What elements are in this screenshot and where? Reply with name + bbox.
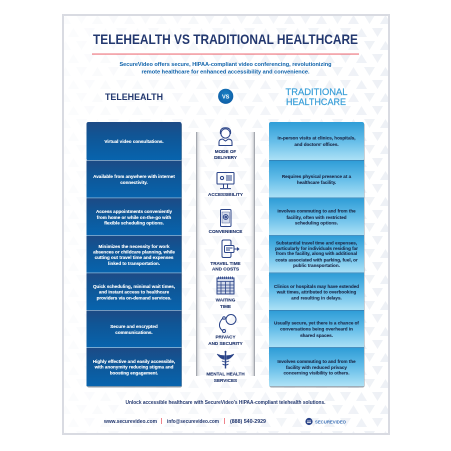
row: mode of delivery: In-person visits at clinics, hospitals,	[277, 136, 356, 141]
row: travel time and costs: linked to transportation.	[108, 261, 160, 266]
row: waiting time	[86, 273, 182, 311]
row: mental health services: Involves commuting to and from the	[277, 359, 356, 364]
title: TELEHEALTH VS TRADITIONAL HEALTHCARE	[93, 32, 358, 47]
row: mental health services: facility with reduced privacy	[286, 365, 347, 370]
label: privacy and security	[208, 335, 243, 346]
row: travel time and costs: from the facility, along with additional	[276, 251, 357, 256]
label: mental health services: SERVICES	[214, 378, 237, 383]
label: travel time and costs: AND COSTS	[212, 266, 239, 271]
row: waiting time: and resulting in delays.	[291, 295, 342, 300]
row: travel time and costs: public transportation.	[293, 263, 340, 268]
icon: waiting time	[217, 276, 234, 294]
footer contact details	[103, 418, 266, 425]
row: mental health services: boosting engagement.	[110, 370, 158, 375]
row: mental health services: Highly effective and easily accessible,	[93, 359, 175, 364]
row: privacy and security	[86, 311, 182, 348]
row: mode of delivery: and doctors' offices.	[294, 142, 339, 147]
row: waiting time: providers via on-demand services.	[97, 295, 171, 300]
row: convenience	[86, 198, 182, 236]
row: privacy and security: communications.	[115, 330, 153, 335]
intro text: SecureVideo offers secure, HIPAA-compliant video conferencing, revolutionizing	[120, 62, 332, 68]
footer contact details: info@securevideo.com	[167, 419, 219, 425]
row: accessibility: Available from anywhere with internet	[93, 174, 175, 179]
label: waiting time	[216, 298, 236, 309]
row: privacy and security: Secure and encrypted	[110, 324, 158, 329]
row: convenience: Involves commuting to and from the	[277, 209, 356, 214]
row: convenience: scheduling options.	[295, 220, 338, 225]
page frame	[63, 15, 389, 434]
label: waiting time: WAITING	[216, 298, 236, 303]
label: privacy and security: PRIVACY	[215, 335, 236, 340]
row: mental health services: concerning visibility to others.	[284, 370, 349, 375]
row: mental health services	[86, 348, 182, 386]
row: travel time and costs: absences or childcare planning, while	[93, 250, 175, 254]
row: travel time and costs	[269, 236, 364, 273]
panel: telehealth column	[86, 122, 182, 388]
row: mental health services: with anonymity reducing stigma and	[94, 365, 174, 370]
icon: travel time and costs	[222, 240, 239, 258]
label: travel time and costs	[210, 261, 241, 271]
row: travel time and costs: costs associated with parking, fuel, or	[275, 258, 358, 263]
footer contact details: www.securevideo.com	[103, 419, 157, 425]
row: mental health services	[269, 348, 364, 386]
label: mental health services: MENTAL HEALTH	[206, 372, 245, 377]
title underline	[92, 53, 359, 56]
row: accessibility: connectivity.	[120, 180, 148, 185]
intro text	[120, 62, 332, 75]
heading: telehealth: TELEHEALTH	[105, 92, 163, 102]
row: accessibility: Requires physical presence at a	[282, 174, 352, 179]
row: travel time and costs	[86, 236, 182, 273]
heading: traditional healthcare	[286, 87, 348, 108]
icon: mental health services	[217, 351, 234, 368]
row: waiting time: wait times, attributed to overbooking	[276, 290, 357, 295]
row: accessibility	[269, 161, 364, 198]
label: mode of delivery: MODE OF	[215, 149, 236, 154]
row: privacy and security: conversations being overheard in	[280, 327, 353, 332]
row: waiting time: Quick scheduling, minimal wait times,	[93, 284, 175, 289]
row: mode of delivery: Virtual video consultations.	[104, 139, 164, 144]
row: convenience	[269, 198, 364, 236]
row: waiting time: and instant access to healthcare	[99, 290, 170, 295]
row: accessibility	[86, 161, 182, 198]
closing statement: Unlock accessible healthcare with SecureVideo's HIPAA-compliant telehealth solutions.	[126, 400, 326, 406]
icon: convenience	[220, 210, 231, 226]
heading: traditional healthcare: TRADITIONAL	[286, 87, 348, 98]
label: convenience: CONVENIENCE	[209, 229, 242, 234]
row: convenience: Access appointments conveniently	[96, 209, 172, 214]
row: mode of delivery	[86, 122, 182, 161]
icon: privacy and security	[219, 314, 236, 332]
row: privacy and security	[269, 311, 364, 348]
vs badge	[218, 89, 233, 104]
label: waiting time: TIME	[220, 304, 231, 309]
row: waiting time	[269, 273, 364, 311]
row: travel time and costs: particularly for individuals residing far	[275, 246, 358, 251]
vs badge: VS	[222, 94, 230, 100]
row: convenience: from home or while on-the-go with	[97, 215, 171, 220]
row: travel time and costs: Minimizes the necessity for work	[98, 244, 170, 249]
row: accessibility: healthcare facility.	[297, 180, 336, 185]
label: mental health services	[206, 372, 245, 383]
icon: mode of delivery	[219, 128, 232, 146]
logo: securevideo: SECUREVIDEO	[315, 420, 346, 426]
label: privacy and security: AND SECURITY	[208, 341, 243, 346]
logo: securevideo	[305, 418, 346, 426]
label: mode of delivery: DELIVERY	[214, 155, 237, 160]
label: mode of delivery	[214, 149, 237, 160]
heading: traditional healthcare: HEALTHCARE	[286, 97, 346, 108]
row: travel time and costs: Substantial travel time and expenses,	[276, 241, 357, 246]
row: privacy and security: Usually secure, yet there is a chance of	[274, 321, 359, 326]
row: waiting time: Clinics or hospitals may have extended	[274, 284, 359, 289]
panel: traditional healthcare column	[269, 122, 364, 388]
footer contact details: (888) 540-2929	[230, 419, 266, 425]
row: mode of delivery	[269, 122, 364, 161]
intro text: remote healthcare for enhanced accessibility and convenience.	[142, 69, 310, 75]
row: convenience: facility, often with restricted	[286, 215, 347, 220]
row: convenience: flexible scheduling options.	[104, 220, 164, 225]
row: travel time and costs: cutting out travel time and expenses	[95, 255, 174, 260]
icon: accessibility	[217, 172, 234, 189]
label: travel time and costs: TRAVEL TIME	[210, 261, 241, 266]
center column rails	[196, 132, 255, 376]
row: privacy and security: shared spaces.	[300, 333, 333, 338]
label: accessibility: ACCESSIBILITY	[208, 192, 243, 197]
